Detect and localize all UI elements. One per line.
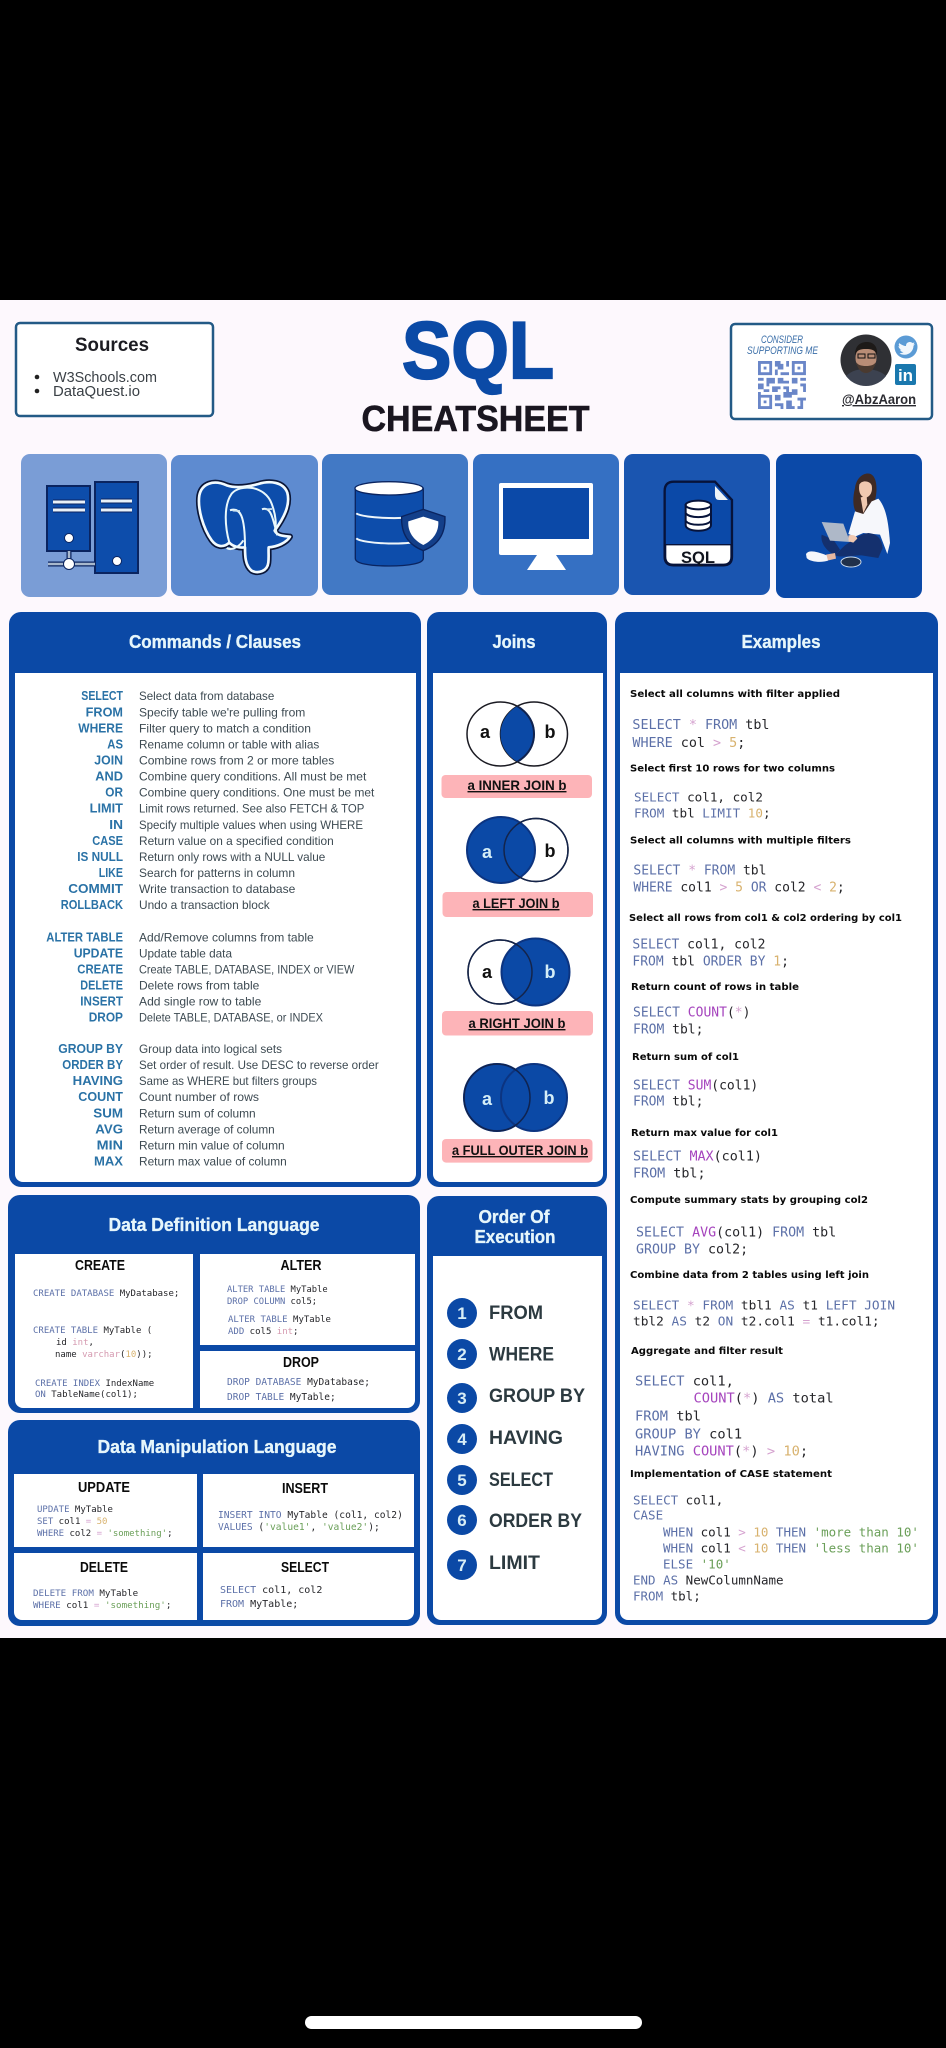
example: case: ELSE '10': [663, 1556, 731, 1572]
step 5: SELECT: [489, 1470, 553, 1491]
sources list: [35, 369, 157, 400]
example: having: HAVING COUNT(*) > 10;: [635, 1444, 808, 1460]
commands group: query keywords: Return only rows with a NULL value: [139, 850, 326, 864]
venn: right join: a: [482, 962, 493, 982]
example: left join: SELECT * FROM tbl1 AS t1 LEFT JOIN: [633, 1298, 895, 1314]
cell: create: CREATE TABLE MyTable (: [33, 1326, 152, 1336]
commands group: table operations: ALTER TABLE: [46, 930, 123, 944]
commands heading: Commands / Clauses: [129, 631, 301, 652]
example: filter: [630, 689, 840, 751]
venn: right join: b: [544, 962, 556, 982]
cell: alter: ALTER TABLE MyTable: [228, 1315, 331, 1325]
example: case: [630, 1469, 919, 1604]
page background: [0, 300, 946, 1638]
cell: insert: INSERT: [282, 1481, 328, 1497]
commands group: query keywords: AND: [95, 770, 123, 784]
example: group by: GROUP BY col2;: [636, 1242, 748, 1258]
commands group: query keywords: ROLLBACK: [61, 898, 123, 912]
step 2: 2: [457, 1345, 467, 1364]
example: multiple filters: [630, 836, 851, 896]
commands group: table operations: UPDATE: [74, 946, 123, 960]
panel: order of execution: [427, 1196, 607, 1625]
commands group: query keywords: [61, 689, 375, 912]
commands group: table operations: Add/Remove columns from table: [139, 930, 314, 944]
step 4: HAVING: [489, 1428, 563, 1449]
DML heading: Data Manipulation Language: [98, 1436, 336, 1457]
commands group: query keywords: Combine query conditions. One must be met: [139, 786, 375, 800]
cell: insert: INSERT INTO MyTable (col1, col2): [218, 1510, 403, 1521]
cell: select: SELECT: [281, 1560, 329, 1576]
commands group: table operations: Delete TABLE, DATABASE, or INDEX: [139, 1011, 323, 1025]
cell: select: SELECT col1, col2: [220, 1585, 322, 1596]
example: case: Implementation of CASE statement: [630, 1469, 832, 1480]
step 3: [447, 1383, 585, 1413]
commands group: aggregation: MAX: [94, 1154, 124, 1168]
support note: SUPPORTING ME: [747, 345, 819, 357]
example: left join: [630, 1270, 895, 1330]
cell: create: name varchar(10));: [55, 1350, 153, 1360]
step 1: FROM: [489, 1303, 543, 1324]
step 2: [447, 1339, 554, 1369]
subtitle: CHEATSHEET: [362, 398, 590, 439]
commands group: aggregation: [58, 1042, 379, 1168]
venn: full outer join: b: [544, 1088, 554, 1108]
label: left join: a LEFT JOIN b: [472, 895, 560, 911]
commands group: query keywords: Specify multiple values when using WHERE: [139, 818, 363, 832]
commands group: aggregation: AVG: [95, 1122, 123, 1136]
cell: alter: [200, 1254, 415, 1345]
label: right join: a RIGHT JOIN b: [468, 1015, 566, 1031]
example: limit: Select first 10 rows for two columns: [630, 764, 835, 774]
example: filter: Select all columns with filter applied: [630, 689, 840, 700]
example: having: COUNT(*) AS total: [694, 1390, 834, 1406]
support note: CONSIDER: [761, 334, 803, 346]
commands group: query keywords: Filter query to match a condition: [139, 721, 311, 735]
label: full outer join: a FULL OUTER JOIN b: [452, 1142, 588, 1158]
commands group: query keywords: SELECT: [81, 689, 123, 703]
venn: full outer join: [464, 1064, 567, 1131]
panel: data manipulation language: [8, 1420, 420, 1626]
cell: create: [15, 1254, 193, 1408]
panel: examples: [615, 612, 938, 1625]
commands group: aggregation: GROUP BY: [58, 1042, 124, 1056]
example: count: FROM tbl;: [633, 1022, 703, 1038]
venn: inner join: b: [544, 722, 556, 742]
order heading: [474, 1206, 556, 1247]
commands group: query keywords: Specify table we're pulling from: [139, 705, 305, 719]
example: multiple filters: WHERE col1 > 5 OR col2 < 2;: [633, 880, 845, 896]
icon: linkedin: in: [898, 366, 913, 385]
commands group: aggregation: Return max value of column: [139, 1154, 287, 1168]
commands group: table operations: Delete rows from table: [139, 978, 260, 992]
commands group: query keywords: IS NULL: [77, 850, 123, 864]
icon: linkedin: [895, 364, 916, 385]
commands group: aggregation: Return sum of column: [139, 1106, 256, 1120]
example: sum: Return sum of col1: [632, 1052, 739, 1063]
step 7: [447, 1550, 540, 1580]
step 7: LIMIT: [489, 1553, 540, 1574]
panel: social support: [731, 324, 932, 419]
venn: left join: a: [482, 842, 493, 862]
commands group: table operations: [46, 930, 355, 1025]
order heading: Execution: [474, 1226, 556, 1247]
commands group: query keywords: Return value on a specified condition: [139, 834, 334, 848]
example: left join: Combine data from 2 tables using left join: [630, 1270, 869, 1281]
example: having: Aggregate and filter result: [631, 1346, 783, 1357]
commands group: query keywords: FROM: [86, 705, 123, 719]
commands group: query keywords: Write transaction to database: [139, 882, 296, 896]
DDL heading: Data Definition Language: [108, 1214, 320, 1235]
example: left join: tbl2 AS t2 ON t2.col1 = t1.col1;: [633, 1314, 880, 1330]
example: limit: FROM tbl LIMIT 10;: [634, 806, 771, 820]
examples heading: Examples: [742, 631, 820, 652]
label: left join: [442, 892, 593, 917]
commands group: query keywords: COMMIT: [68, 882, 123, 896]
step 6: ORDER BY: [489, 1511, 582, 1532]
commands group: query keywords: Rename column or table with alias: [139, 737, 319, 751]
commands group: table operations: DELETE: [80, 978, 123, 992]
label: full outer join: [442, 1139, 592, 1163]
example: case: FROM tbl;: [633, 1588, 701, 1604]
commands group: aggregation: COUNT: [78, 1090, 123, 1104]
commands group: query keywords: AS: [107, 737, 123, 751]
support note: [747, 334, 819, 357]
SQL file label: SQL: [681, 548, 715, 567]
example: sum: SELECT SUM(col1): [633, 1078, 758, 1094]
icon tile: postgres elephant: [171, 455, 318, 596]
icon tile: servers: [21, 454, 167, 597]
step 5: [447, 1465, 553, 1495]
cell: create: ON TableName(col1);: [35, 1390, 138, 1400]
icon tile: person with laptop: [776, 454, 922, 598]
icon tile: monitor: [473, 454, 619, 595]
sources list: W3Schools.com: [53, 369, 157, 386]
cell: create: CREATE INDEX IndexName: [35, 1379, 154, 1389]
cell: create: id int,: [56, 1338, 94, 1348]
step 6: 6: [457, 1511, 467, 1530]
commands group: query keywords: Limit rows returned. See also FETCH & TOP: [139, 802, 364, 816]
icon tile: SQL file: [624, 454, 770, 595]
example: group by: Compute summary stats by grouping col2: [630, 1195, 868, 1206]
step 3: GROUP BY: [489, 1386, 585, 1407]
venn: full outer join: a: [482, 1089, 493, 1109]
commands group: aggregation: Return min value of column: [139, 1138, 285, 1152]
commands group: query keywords: JOIN: [94, 754, 123, 768]
panel: sources: [16, 323, 213, 416]
cell: update: UPDATE MyTable: [37, 1505, 113, 1515]
cell: insert: VALUES ('value1', 'value2');: [218, 1522, 380, 1533]
venn: inner join: [467, 702, 568, 766]
commands group: aggregation: Count number of rows: [139, 1090, 259, 1104]
title: SQL: [402, 306, 554, 396]
example: case: WHEN col1 < 10 THEN 'less than 10': [663, 1540, 919, 1556]
commands group: query keywords: LIMIT: [90, 802, 123, 816]
example: having: SELECT col1,: [635, 1374, 734, 1390]
commands group: aggregation: ORDER BY: [62, 1058, 124, 1072]
home indicator: [305, 2016, 642, 2029]
commands group: table operations: DROP: [89, 1011, 123, 1025]
example: order by: [629, 913, 902, 970]
example: count: Return count of rows in table: [631, 982, 799, 993]
step 4: 4: [457, 1430, 467, 1449]
commands group: aggregation: Same as WHERE but filters groups: [139, 1074, 317, 1088]
step 1: 1: [457, 1304, 467, 1323]
commands group: aggregation: Return average of column: [139, 1122, 275, 1136]
commands group: table operations: CREATE: [77, 962, 123, 976]
commands group: aggregation: SUM: [93, 1106, 123, 1120]
commands group: aggregation: MIN: [97, 1138, 123, 1152]
cell: delete: DELETE FROM MyTable: [33, 1588, 138, 1599]
commands group: table operations: INSERT: [80, 995, 123, 1009]
example: max: SELECT MAX(col1): [633, 1150, 762, 1164]
sources list: DataQuest.io: [53, 383, 140, 400]
commands group: query keywords: WHERE: [78, 721, 123, 735]
venn: left join: b: [544, 841, 556, 861]
panel: commands / clauses: [9, 612, 421, 1187]
example: case: CASE: [633, 1508, 663, 1522]
cell: alter: DROP COLUMN col5;: [227, 1297, 317, 1307]
label: inner join: a INNER JOIN b: [468, 777, 566, 793]
example: multiple filters: Select all columns with multiple filters: [630, 836, 851, 846]
QR code: [758, 361, 806, 409]
example: filter: SELECT * FROM tbl: [632, 718, 769, 733]
joins heading: Joins: [492, 631, 536, 652]
cell: drop: DROP TABLE MyTable;: [227, 1392, 336, 1403]
example: sum: FROM tbl;: [633, 1094, 703, 1110]
example: order by: FROM tbl ORDER BY 1;: [632, 954, 789, 970]
cell: delete: DELETE: [80, 1560, 128, 1576]
cell: drop: [200, 1351, 415, 1408]
example: max: [631, 1128, 778, 1182]
cell: create: CREATE DATABASE MyDatabase;: [33, 1289, 179, 1299]
example: count: SELECT COUNT(*): [633, 1006, 750, 1020]
label: inner join: [442, 775, 592, 798]
sources heading: Sources: [75, 335, 149, 356]
step 6: [447, 1505, 582, 1535]
icon: twitter: [894, 336, 918, 358]
step 5: 5: [457, 1471, 467, 1490]
commands group: table operations: Update table data: [139, 946, 232, 960]
panel: joins: [427, 612, 607, 1187]
author photo: [840, 334, 892, 386]
example: case: END AS NewColumnName: [633, 1572, 784, 1588]
venn: right join: [468, 938, 570, 1006]
venn: left join: [467, 817, 568, 883]
title: [362, 306, 590, 439]
cell: alter: ALTER TABLE MyTable: [227, 1285, 328, 1295]
example: having: FROM tbl: [635, 1408, 701, 1424]
example: case: WHEN col1 > 10 THEN 'more than 10': [663, 1524, 919, 1540]
cell: alter: ALTER: [280, 1258, 322, 1274]
cell: alter: ADD col5 int;: [228, 1327, 298, 1337]
step 4: [447, 1424, 563, 1454]
venn: inner join: a: [480, 722, 491, 742]
label: right join: [442, 1011, 593, 1036]
commands group: aggregation: HAVING: [73, 1074, 123, 1088]
example: case: SELECT col1,: [633, 1492, 723, 1508]
example: count: [631, 982, 799, 1038]
commands group: query keywords: Search for patterns in column: [139, 866, 295, 880]
example: group by: [630, 1195, 868, 1258]
cell: drop: DROP DATABASE MyDatabase;: [227, 1377, 370, 1388]
cell: update: [14, 1474, 197, 1547]
cell: create: CREATE: [75, 1258, 125, 1274]
example: filter: WHERE col > 5;: [632, 736, 745, 751]
example: sum: [632, 1052, 758, 1110]
commands group: query keywords: Select data from database: [139, 689, 275, 703]
step 7: 7: [457, 1556, 467, 1575]
step 1: [447, 1298, 543, 1328]
author handle: @AbzAaron: [842, 391, 916, 407]
order heading: Order Of: [478, 1206, 550, 1227]
example: order by: SELECT col1, col2: [632, 938, 765, 952]
example: limit: SELECT col1, col2: [634, 790, 763, 804]
example: limit: [630, 764, 835, 820]
commands group: table operations: Create TABLE, DATABASE, INDEX or VIEW: [139, 962, 355, 976]
cell: delete: [14, 1553, 197, 1620]
step 2: WHERE: [489, 1344, 554, 1366]
panel: data definition language: [8, 1195, 420, 1413]
cell: select: FROM MyTable;: [220, 1599, 298, 1610]
commands group: query keywords: OR: [105, 786, 123, 800]
cell: update: WHERE col2 = 'something';: [37, 1529, 172, 1539]
commands group: aggregation: Set order of result. Use DESC to reverse order: [139, 1058, 379, 1072]
example: group by: SELECT AVG(col1) FROM tbl: [636, 1226, 836, 1240]
cell: drop: DROP: [283, 1355, 319, 1371]
icon tile: database shield: [322, 454, 468, 595]
cell: update: UPDATE: [78, 1480, 130, 1496]
cell: delete: WHERE col1 = 'something';: [33, 1600, 171, 1611]
commands group: aggregation: Group data into logical sets: [139, 1042, 282, 1056]
cell: update: SET col1 = 50: [37, 1517, 107, 1527]
example: having: GROUP BY col1: [635, 1426, 742, 1442]
commands group: query keywords: Undo a transaction block: [139, 898, 271, 912]
commands group: query keywords: Combine rows from 2 or more tables: [139, 754, 334, 768]
cell: insert: [203, 1474, 414, 1547]
example: max: Return max value for col1: [631, 1128, 778, 1139]
cell: select: [203, 1553, 414, 1620]
step 3: 3: [457, 1389, 467, 1408]
commands group: query keywords: IN: [109, 818, 123, 832]
commands group: query keywords: CASE: [92, 834, 123, 848]
example: max: FROM tbl;: [633, 1166, 706, 1182]
example: having: [631, 1346, 834, 1460]
example: order by: Select all rows from col1 & col2 ordering by col1: [629, 913, 902, 924]
commands group: query keywords: Combine query conditions. All must be met: [139, 770, 367, 784]
example: multiple filters: SELECT * FROM tbl: [633, 864, 766, 878]
panel: icon tiles: [21, 454, 922, 598]
commands group: table operations: Add single row to table: [139, 995, 262, 1009]
commands group: query keywords: LIKE: [99, 866, 123, 880]
